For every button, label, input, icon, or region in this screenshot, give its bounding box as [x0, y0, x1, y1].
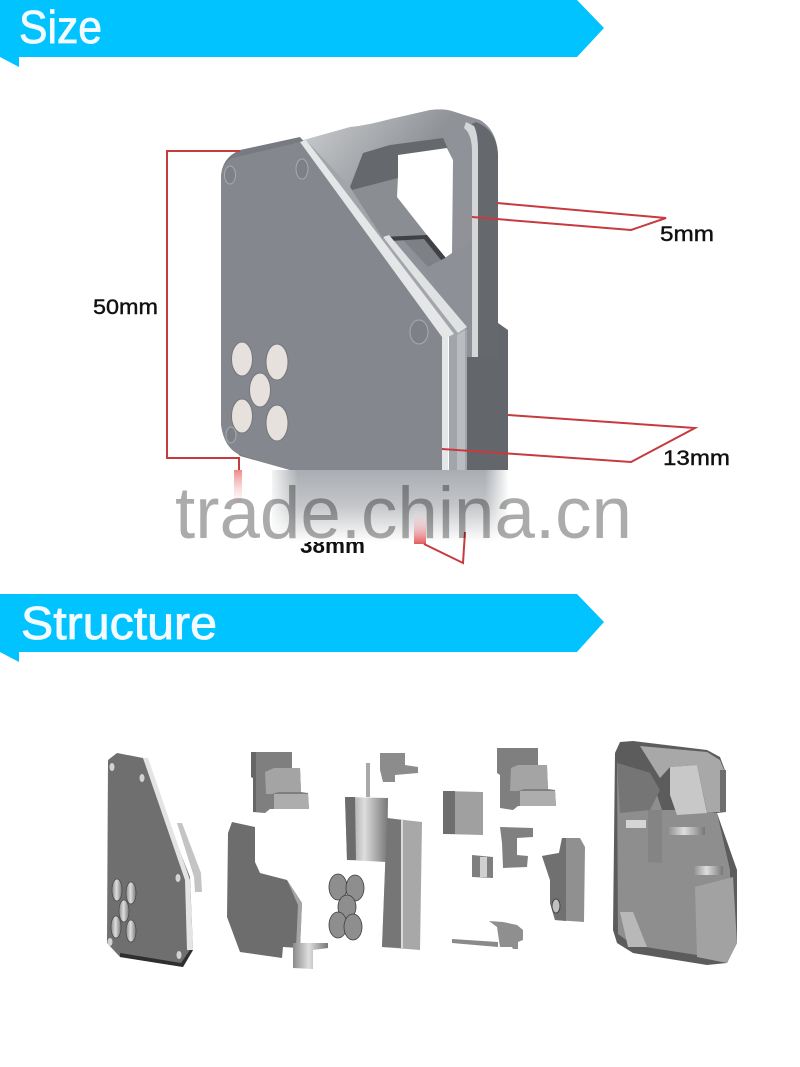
housing top-left pocket: [617, 763, 660, 813]
hole inner light facet: [352, 178, 430, 240]
part: upper block right: [497, 748, 556, 810]
housing interior: [617, 763, 730, 955]
dimension: bottom 38mm: [424, 532, 465, 563]
dimension: 5mm: [472, 203, 666, 230]
part: peg: [293, 943, 328, 969]
diagonal highlight: [383, 235, 467, 333]
part: tiny cube: [472, 855, 493, 878]
exploded structure diagram: [107, 741, 737, 969]
part: small bracket: [452, 921, 523, 949]
part: lever: [542, 838, 585, 922]
dimension: 50mm bracket: [167, 151, 240, 470]
housing outer wall: [695, 877, 737, 963]
housing pins: [667, 827, 705, 835]
housing lower wedge: [620, 912, 647, 947]
part: rear housing: [613, 741, 737, 965]
dimension: 13mm: [442, 415, 695, 462]
heading: Structure: Structure: [21, 597, 217, 649]
housing latch: [670, 765, 707, 815]
fading lower edge of device: [234, 470, 509, 544]
label: 5mm: 5mm: [660, 223, 714, 246]
part: motor shaft: [366, 763, 370, 797]
banner: Size: [0, 0, 604, 67]
part: long block: [382, 818, 422, 950]
banner: Structure: [0, 594, 604, 662]
handle hole: [397, 148, 453, 258]
housing top rim: [640, 746, 726, 812]
device illustration: [221, 109, 508, 470]
lower body side: [465, 323, 508, 470]
vertical strips: [457, 330, 465, 470]
housing column: [648, 810, 662, 863]
slider: [382, 235, 445, 267]
magnets: [232, 342, 288, 441]
label: 50mm: 50mm: [93, 296, 158, 319]
part: hook clip: [500, 827, 533, 868]
front plate: [221, 142, 448, 470]
lower handle wedge: [403, 240, 472, 357]
hidden dimension: 38mm: 38mm: [300, 533, 365, 558]
dimension lines: [167, 151, 695, 563]
part: upper block left: [251, 752, 309, 813]
handle side: [470, 122, 498, 357]
screws: [224, 159, 428, 443]
heading: Size: Size: [19, 1, 102, 53]
label: 13mm: 13mm: [663, 447, 730, 470]
front plate bevel: [221, 137, 320, 470]
watermark: trade.china.cn: [175, 473, 632, 554]
part: rollers: [329, 874, 364, 940]
handle edge highlight: [464, 122, 478, 357]
part: clip top: [380, 753, 418, 782]
hole inner wall: [350, 138, 453, 237]
diagonal band: [306, 140, 467, 470]
plate edge highlight: [300, 140, 454, 470]
part: inner plate: [227, 822, 302, 958]
handle: [300, 109, 498, 357]
part: small box: [443, 791, 483, 835]
part: front plate: [107, 753, 202, 967]
part: motor: [345, 797, 388, 862]
